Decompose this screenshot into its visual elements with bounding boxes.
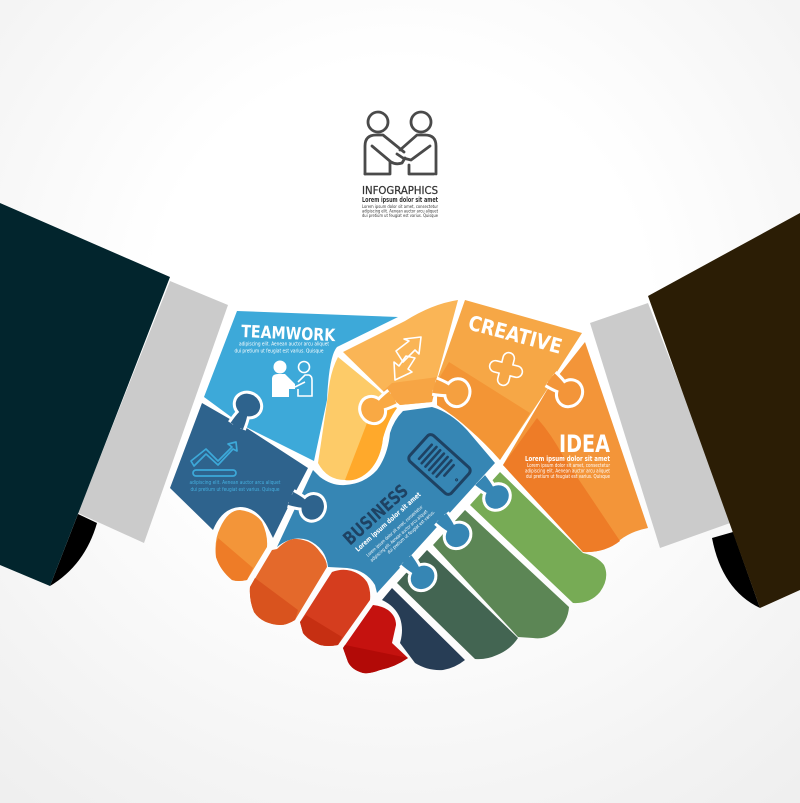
chart text: [190, 480, 281, 493]
finger 1: [216, 510, 267, 581]
tab from creative: [543, 369, 586, 410]
header icon: two people shaking hands: [365, 112, 436, 174]
finger 2: [250, 539, 327, 625]
teamwork text: dui pretium ut feugiat est varius. Quisque: [234, 348, 324, 354]
header body text: [362, 204, 438, 219]
panel: green fingers: [382, 472, 606, 670]
business text: dui pretium ut feugiat est varius.: [386, 510, 436, 555]
panel: creative: [431, 300, 582, 460]
finger 4: [343, 605, 408, 673]
tab into adjacent panel: [431, 374, 471, 408]
icon: plus: [493, 356, 519, 382]
business text: Lorem ipsum dolor sit amet, consectetur: [365, 504, 424, 558]
header subtitle: Lorem ipsum dolor sit amet: [362, 195, 438, 204]
idea text: [525, 455, 611, 480]
left sleeve: [0, 203, 228, 586]
chart text: adipiscing elit. Aenean auctor arcu aliquet: [190, 480, 281, 486]
header body text: Lorem ipsum dolor sit amet, consectetur: [362, 204, 438, 210]
idea text: Lorem ipsum dolor sit amet, consectetur: [527, 463, 610, 469]
teamwork text: adipiscing elit. Aenean auctor arcu aliquet: [239, 342, 329, 348]
business text: Lorem ipsum dolor sit amet: [354, 490, 423, 553]
header body text: adipiscing elit. Aenean auctor arcu aliquet: [362, 208, 438, 214]
puzzle tabs: dark blue into teamwork and business: [226, 389, 328, 523]
panel: thumb: [318, 357, 397, 480]
panel: idea: [503, 342, 648, 552]
teamwork text: [234, 342, 329, 354]
panel: arrows: [343, 300, 458, 426]
idea heading: IDEA: [559, 430, 610, 458]
tab into thumb: [357, 387, 400, 426]
puzzle tabs: blue into green fingers: [397, 471, 514, 594]
business text: adipiscing elit. Aenean auctor arcu aliquet: [369, 509, 429, 563]
idea text: dui pretium ut feugiat est varius. Quisque: [526, 474, 610, 480]
icon: teamwork people: [272, 360, 312, 397]
finger 3: [300, 570, 370, 646]
fingers: orange to red: [216, 510, 408, 673]
teamwork heading: TEAMWORK: [241, 322, 336, 346]
right sleeve: [590, 213, 800, 608]
panel: market chart: [170, 403, 308, 538]
idea text: adipiscing elit. Aenean auctor arcu aliquet: [525, 468, 610, 474]
icon: growth chart: [191, 442, 237, 476]
header body text: dui pretium ut feugiat est varius. Quisque: [362, 213, 438, 219]
panel: business: [277, 407, 495, 593]
idea text: Lorem ipsum dolor sit amet: [525, 455, 611, 463]
chart text: dui pretium ut feugiat est varius. Quisque: [190, 487, 280, 493]
panel: teamwork: [204, 311, 398, 461]
business heading: BUSINESS: [339, 481, 413, 550]
creative heading: CREATIVE: [466, 311, 565, 359]
icon: double arrow: [394, 337, 421, 380]
header title: INFOGRAPHICS: [362, 185, 438, 197]
icon: tablet: [407, 433, 472, 496]
